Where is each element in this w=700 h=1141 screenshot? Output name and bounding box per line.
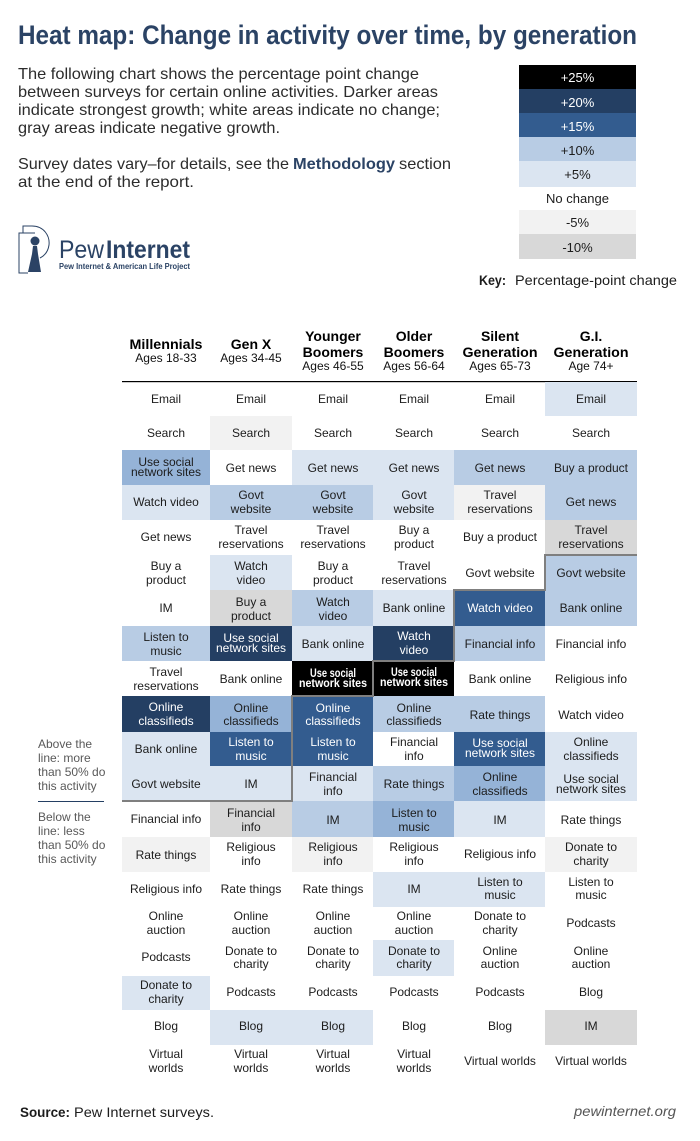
column: Gen X: Rate things	[221, 882, 281, 896]
website credit: pewinternet.org	[573, 1103, 676, 1119]
header: Older Boomers	[383, 328, 445, 373]
column: Younger Boomers: Rate things	[303, 882, 363, 896]
column: Gen X: Online	[234, 701, 269, 715]
header: Millennials: Millennials	[130, 336, 203, 352]
column: Gen X: Financial	[227, 806, 275, 820]
column: G.I. Generation: Listen to	[568, 875, 614, 889]
column: Older Boomers: Get news	[389, 461, 439, 475]
column: Millennials: network sites	[131, 465, 201, 479]
column: Gen X: Buy a	[236, 595, 267, 609]
column: Silent Generation: Search	[481, 426, 519, 440]
column: Silent Generation: Travel	[484, 488, 516, 502]
header: Younger Boomers: Boomers	[303, 344, 364, 360]
column: Older Boomers: Use social	[391, 665, 437, 679]
column: Older Boomers: Financial	[390, 735, 438, 749]
column: G.I. Generation: Virtual worlds	[555, 1054, 627, 1068]
column: Silent Generation: Get news	[475, 461, 525, 475]
column: G.I. Generation: reservations	[558, 537, 624, 551]
column: Older Boomers: charity	[396, 957, 432, 971]
side note: above and below the line	[38, 737, 106, 866]
column: Millennials: Religious info	[130, 882, 202, 896]
column: Silent Generation: music	[484, 888, 516, 902]
column: Millennials: Online	[149, 909, 184, 923]
column: Older Boomers: Podcasts	[389, 985, 439, 999]
header: Younger Boomers	[302, 328, 364, 373]
column: Millennials: Virtual	[149, 1047, 183, 1061]
column: Millennials: Travel	[150, 665, 182, 679]
column: Gen X: Watch	[234, 559, 268, 573]
column: Silent Generation: Virtual worlds	[464, 1054, 536, 1068]
column: Gen X: Religious	[226, 840, 276, 854]
legend key caption: Key:	[479, 272, 506, 288]
column: Millennials: reservations	[133, 679, 199, 693]
column: Younger Boomers: Watch	[316, 595, 350, 609]
column: Younger Boomers: video	[319, 609, 348, 623]
header: Older Boomers: Ages 56-64	[383, 359, 445, 373]
column: G.I. Generation: Podcasts	[566, 916, 616, 930]
header: G.I. Generation: Generation	[554, 344, 628, 360]
column: Millennials: Online	[149, 700, 184, 714]
column: G.I. Generation: charity	[573, 854, 609, 868]
legend item +10%	[519, 137, 636, 161]
column: Gen X: website	[230, 502, 272, 516]
column: Younger Boomers: IM	[326, 813, 340, 827]
column: Silent Generation: classifieds	[472, 784, 528, 798]
column: Millennials: IM	[159, 601, 173, 615]
legend key caption: Percentage-point change	[515, 272, 677, 288]
column: Older Boomers: Buy a	[399, 523, 430, 537]
column: Gen X: IM	[244, 777, 258, 791]
column: Older Boomers: auction	[395, 923, 433, 937]
column: Gen X: Govt	[238, 488, 264, 502]
side note: above and below the line: than 50% do	[38, 838, 106, 852]
column: G.I. Generation: music	[575, 888, 607, 902]
column: Silent Generation	[454, 392, 545, 1068]
header: Silent Generation	[462, 328, 538, 373]
column: Older Boomers: video	[400, 643, 429, 657]
logo: Pew Internet: Pew	[59, 236, 105, 264]
header: Older Boomers: Older	[396, 328, 433, 344]
column: Younger Boomers: Donate to	[307, 944, 359, 958]
column: Gen X: classifieds	[223, 714, 279, 728]
side note: above and below the line: line: more	[38, 751, 91, 765]
legend: percentage-point change	[519, 65, 636, 259]
column: Gen X: product	[231, 609, 272, 623]
column: G.I. Generation: Religious info	[555, 672, 627, 686]
column: Millennials: Rate things	[136, 848, 196, 862]
column: G.I. Generation: Rate things	[561, 813, 621, 827]
column: Older Boomers: Rate things	[384, 777, 444, 791]
column: G.I. Generation: Get news	[566, 495, 616, 509]
logo: Pew Internet: Internet	[106, 236, 191, 264]
column: Older Boomers: network sites	[380, 675, 448, 689]
column: Older Boomers: Virtual	[397, 1047, 431, 1061]
column: Millennials: Donate to	[140, 978, 192, 992]
side note: above and below the line: this activity	[38, 852, 97, 866]
text block: introduction: gray areas indicate negative growth.	[18, 120, 280, 137]
column: Younger Boomers: product	[313, 573, 354, 587]
column: Millennials: Use social	[138, 455, 194, 469]
column: Silent Generation: Rate things	[470, 708, 530, 722]
column: Older Boomers: website	[393, 502, 435, 516]
column: G.I. Generation: Use social	[563, 772, 619, 786]
column: Silent Generation: IM	[493, 813, 507, 827]
text block: introduction: The following chart shows the percentage point change	[18, 66, 419, 83]
column: Older Boomers: worlds	[396, 1061, 431, 1075]
column: Millennials: classifieds	[138, 714, 194, 728]
column: G.I. Generation: Financial info	[556, 637, 627, 651]
column: Younger Boomers: Search	[314, 426, 352, 440]
text block: introduction: Methodology	[293, 156, 395, 173]
column: Younger Boomers: worlds	[315, 1061, 350, 1075]
text block: introduction: at the end of the report.	[18, 174, 194, 191]
column: Gen X: reservations	[218, 537, 284, 551]
column: Older Boomers: Blog	[402, 1019, 426, 1033]
legend item no change: No change	[546, 191, 609, 206]
column: Gen X: Online	[234, 909, 269, 923]
header: G.I. Generation: Age 74+	[568, 359, 614, 373]
column: Older Boomers: Watch	[397, 629, 431, 643]
column: Millennials: charity	[148, 992, 184, 1006]
legend item +25%: +25%	[561, 70, 595, 85]
legend item -10%: -10%	[562, 240, 593, 255]
side note: above and below the line: this activity	[38, 779, 97, 793]
side note: above and below the line: line: less	[38, 824, 85, 838]
column: G.I. Generation	[545, 382, 637, 1068]
column: Younger Boomers: Online	[316, 909, 351, 923]
column: Younger Boomers: Podcasts	[308, 985, 358, 999]
header: G.I. Generation	[554, 328, 628, 373]
column: G.I. Generation: Email	[576, 392, 606, 406]
column: Older Boomers: Govt	[401, 488, 427, 502]
header: Millennials: Ages 18-33	[135, 351, 197, 365]
header: Younger Boomers: Ages 46-55	[302, 359, 364, 373]
column: Gen X: auction	[232, 923, 270, 937]
column: Millennials: music	[150, 644, 182, 658]
column: Younger Boomers: Govt	[320, 488, 346, 502]
column: Silent Generation: Bank online	[469, 672, 532, 686]
column: Older Boomers: Online	[397, 701, 432, 715]
header: Gen X: Gen X	[231, 336, 272, 352]
column: Gen X: network sites	[216, 641, 286, 655]
column: Gen X: Donate to	[225, 944, 277, 958]
column: Millennials: Email	[151, 392, 181, 406]
column: G.I. Generation: Buy a product	[554, 461, 629, 475]
column: Older Boomers: product	[394, 537, 435, 551]
column: Silent Generation: Email	[485, 392, 515, 406]
column: G.I. Generation: Watch video	[558, 708, 624, 722]
column: Gen X: Travel	[235, 523, 267, 537]
column: Gen X: charity	[233, 957, 269, 971]
column: Gen X	[210, 392, 292, 1075]
column: Younger Boomers: Travel	[317, 523, 349, 537]
column: Millennials: Govt website	[131, 777, 201, 791]
header: Silent Generation: Generation	[462, 344, 538, 360]
column: Silent Generation: Religious info	[464, 847, 536, 861]
column: Silent Generation: Podcasts	[475, 985, 525, 999]
column: Younger Boomers: Get news	[308, 461, 358, 475]
text block: introduction: indicate strongest growth; white areas indicate no change;	[18, 102, 440, 119]
column: Older Boomers: Religious	[389, 840, 439, 854]
column: Gen X: video	[237, 573, 266, 587]
legend item -5%: -5%	[566, 215, 589, 230]
column: G.I. Generation: Online	[574, 735, 609, 749]
legend item +20%: +20%	[561, 95, 595, 110]
column: Older Boomers: Donate to	[388, 944, 440, 958]
column: Gen X: Search	[232, 426, 270, 440]
column: Older Boomers: reservations	[381, 573, 447, 587]
column: Younger Boomers: Religious	[308, 840, 358, 854]
column: Silent Generation: Listen to	[477, 875, 523, 889]
side note: above and below the line: Below the	[38, 810, 91, 824]
column: Younger Boomers: Use social	[310, 666, 356, 680]
column: Younger Boomers: website	[312, 502, 354, 516]
column: Silent Generation: charity	[482, 923, 518, 937]
column: Younger Boomers: Blog	[321, 1019, 345, 1033]
header: Gen X: Ages 34-45	[220, 351, 282, 365]
column: Silent Generation: Govt website	[465, 566, 535, 580]
column: Millennials: Financial info	[131, 812, 202, 826]
column: Gen X: Email	[236, 392, 266, 406]
header: Silent Generation: Ages 65-73	[469, 359, 531, 373]
column: Gen X: Virtual	[234, 1047, 268, 1061]
column: Silent Generation: reservations	[467, 502, 533, 516]
column: Millennials: product	[146, 573, 187, 587]
column: G.I. Generation: Online	[574, 944, 609, 958]
title: Heat map: Change in activity over time, by generation	[18, 20, 637, 50]
header: Older Boomers: Boomers	[384, 344, 445, 360]
text block: introduction: section	[399, 156, 451, 173]
column: Older Boomers: Travel	[398, 559, 430, 573]
column: Younger Boomers: reservations	[300, 537, 366, 551]
header: Younger Boomers: Younger	[305, 328, 361, 344]
column: Older Boomers: Bank online	[383, 601, 446, 615]
column: Younger Boomers: Buy a	[318, 559, 349, 573]
column: Silent Generation: Use social	[472, 736, 528, 750]
column: G.I. Generation: Bank online	[560, 601, 623, 615]
column: Younger Boomers	[292, 392, 373, 1075]
column: G.I. Generation: Travel	[575, 523, 607, 537]
side note: above and below the line: Above the	[38, 737, 92, 751]
legend item +5%	[519, 161, 636, 187]
source note: Source:	[20, 1104, 70, 1120]
header: Gen X	[220, 336, 282, 365]
column: G.I. Generation: classifieds	[563, 749, 619, 763]
column: Millennials: Search	[147, 426, 185, 440]
legend item -5%	[519, 210, 636, 234]
column: Younger Boomers: Online	[316, 701, 351, 715]
legend item +10%: +10%	[561, 143, 595, 158]
column: Older Boomers: Online	[397, 909, 432, 923]
column: G.I. Generation: IM	[584, 1019, 598, 1033]
column: Silent Generation: Buy a product	[463, 530, 538, 544]
column headers	[130, 328, 628, 373]
column: Gen X: worlds	[233, 1061, 268, 1075]
column: Gen X: Get news	[226, 461, 276, 475]
column: Younger Boomers: classifieds	[305, 714, 361, 728]
column: G.I. Generation: Search	[572, 426, 610, 440]
column: Silent Generation: network sites	[465, 746, 535, 760]
column: Millennials: Listen to	[143, 630, 189, 644]
column: Older Boomers: classifieds	[386, 714, 442, 728]
column: Gen X: info	[241, 820, 261, 834]
column: Younger Boomers: network sites	[299, 676, 367, 690]
text block: introduction	[18, 66, 451, 191]
column: Silent Generation: Blog	[488, 1019, 512, 1033]
column: Younger Boomers: Bank online	[302, 637, 365, 651]
legend item -10%	[519, 234, 636, 259]
logo: Pew Internet: Pew Internet & American Life Project	[59, 262, 190, 271]
header: Millennials	[130, 336, 203, 365]
legend item +25%	[519, 65, 636, 89]
column: Millennials: Get news	[141, 530, 191, 544]
column: Millennials: Buy a	[151, 559, 182, 573]
column: Younger Boomers: Virtual	[316, 1047, 350, 1061]
column: Gen X: Use social	[223, 631, 279, 645]
icon: Pew figure	[19, 226, 49, 273]
column: Millennials: auction	[147, 923, 185, 937]
column: Silent Generation: Financial info	[465, 637, 536, 651]
column: Silent Generation: auction	[481, 957, 519, 971]
column: Millennials: Podcasts	[141, 950, 191, 964]
column: Gen X: Bank online	[220, 672, 283, 686]
text block: introduction: between surveys for certain online activities. Darker areas	[18, 84, 438, 101]
column: Younger Boomers: info	[323, 854, 343, 868]
column: Older Boomers: Listen to	[391, 806, 437, 820]
legend item +15%	[519, 113, 636, 137]
column: Gen X: music	[235, 749, 267, 763]
column: G.I. Generation: Govt website	[556, 566, 626, 580]
column: Older Boomers: IM	[407, 882, 421, 896]
legend item +20%	[519, 89, 636, 113]
column: Older Boomers	[373, 392, 454, 1075]
column: Gen X: Podcasts	[226, 985, 276, 999]
text block: introduction: Survey dates vary–for details, see the	[18, 156, 289, 173]
column: Older Boomers: info	[404, 749, 424, 763]
50% threshold line	[122, 555, 637, 801]
logo: Pew Internet	[19, 226, 191, 273]
header: G.I. Generation: G.I.	[580, 328, 602, 344]
column: Gen X: Blog	[239, 1019, 263, 1033]
column: Millennials: Blog	[154, 1019, 178, 1033]
legend item +5%: +5%	[564, 167, 591, 182]
column: Younger Boomers: auction	[314, 923, 352, 937]
column: Younger Boomers: Email	[318, 392, 348, 406]
source note	[20, 1104, 214, 1120]
column: Gen X: Listen to	[228, 735, 274, 749]
column: Gen X: info	[241, 854, 261, 868]
column: Millennials	[122, 392, 210, 1075]
legend item +15%: +15%	[561, 119, 595, 134]
column: Older Boomers: Search	[395, 426, 433, 440]
source note: Pew Internet surveys.	[74, 1104, 214, 1120]
column: Older Boomers: music	[398, 820, 430, 834]
column: Younger Boomers: charity	[315, 957, 351, 971]
column: Millennials: worlds	[148, 1061, 183, 1075]
column: G.I. Generation: Donate to	[565, 840, 617, 854]
column: Younger Boomers: Financial	[309, 770, 357, 784]
column: Silent Generation: Online	[483, 944, 518, 958]
column: G.I. Generation: auction	[572, 957, 610, 971]
column: G.I. Generation: Blog	[579, 985, 603, 999]
column: Older Boomers: info	[404, 854, 424, 868]
column: Younger Boomers: music	[317, 749, 349, 763]
column: Silent Generation: Watch video	[467, 601, 533, 615]
column: G.I. Generation: network sites	[556, 782, 626, 796]
column: Older Boomers: Email	[399, 392, 429, 406]
column: Younger Boomers: Listen to	[310, 735, 356, 749]
header: Silent Generation: Silent	[481, 328, 519, 344]
column: Silent Generation: Online	[483, 770, 518, 784]
column: Younger Boomers: info	[323, 784, 343, 798]
column: Silent Generation: Donate to	[474, 909, 526, 923]
column: Millennials: Watch video	[133, 495, 199, 509]
side note: above and below the line: than 50% do	[38, 765, 106, 779]
column: Millennials: Bank online	[135, 742, 198, 756]
